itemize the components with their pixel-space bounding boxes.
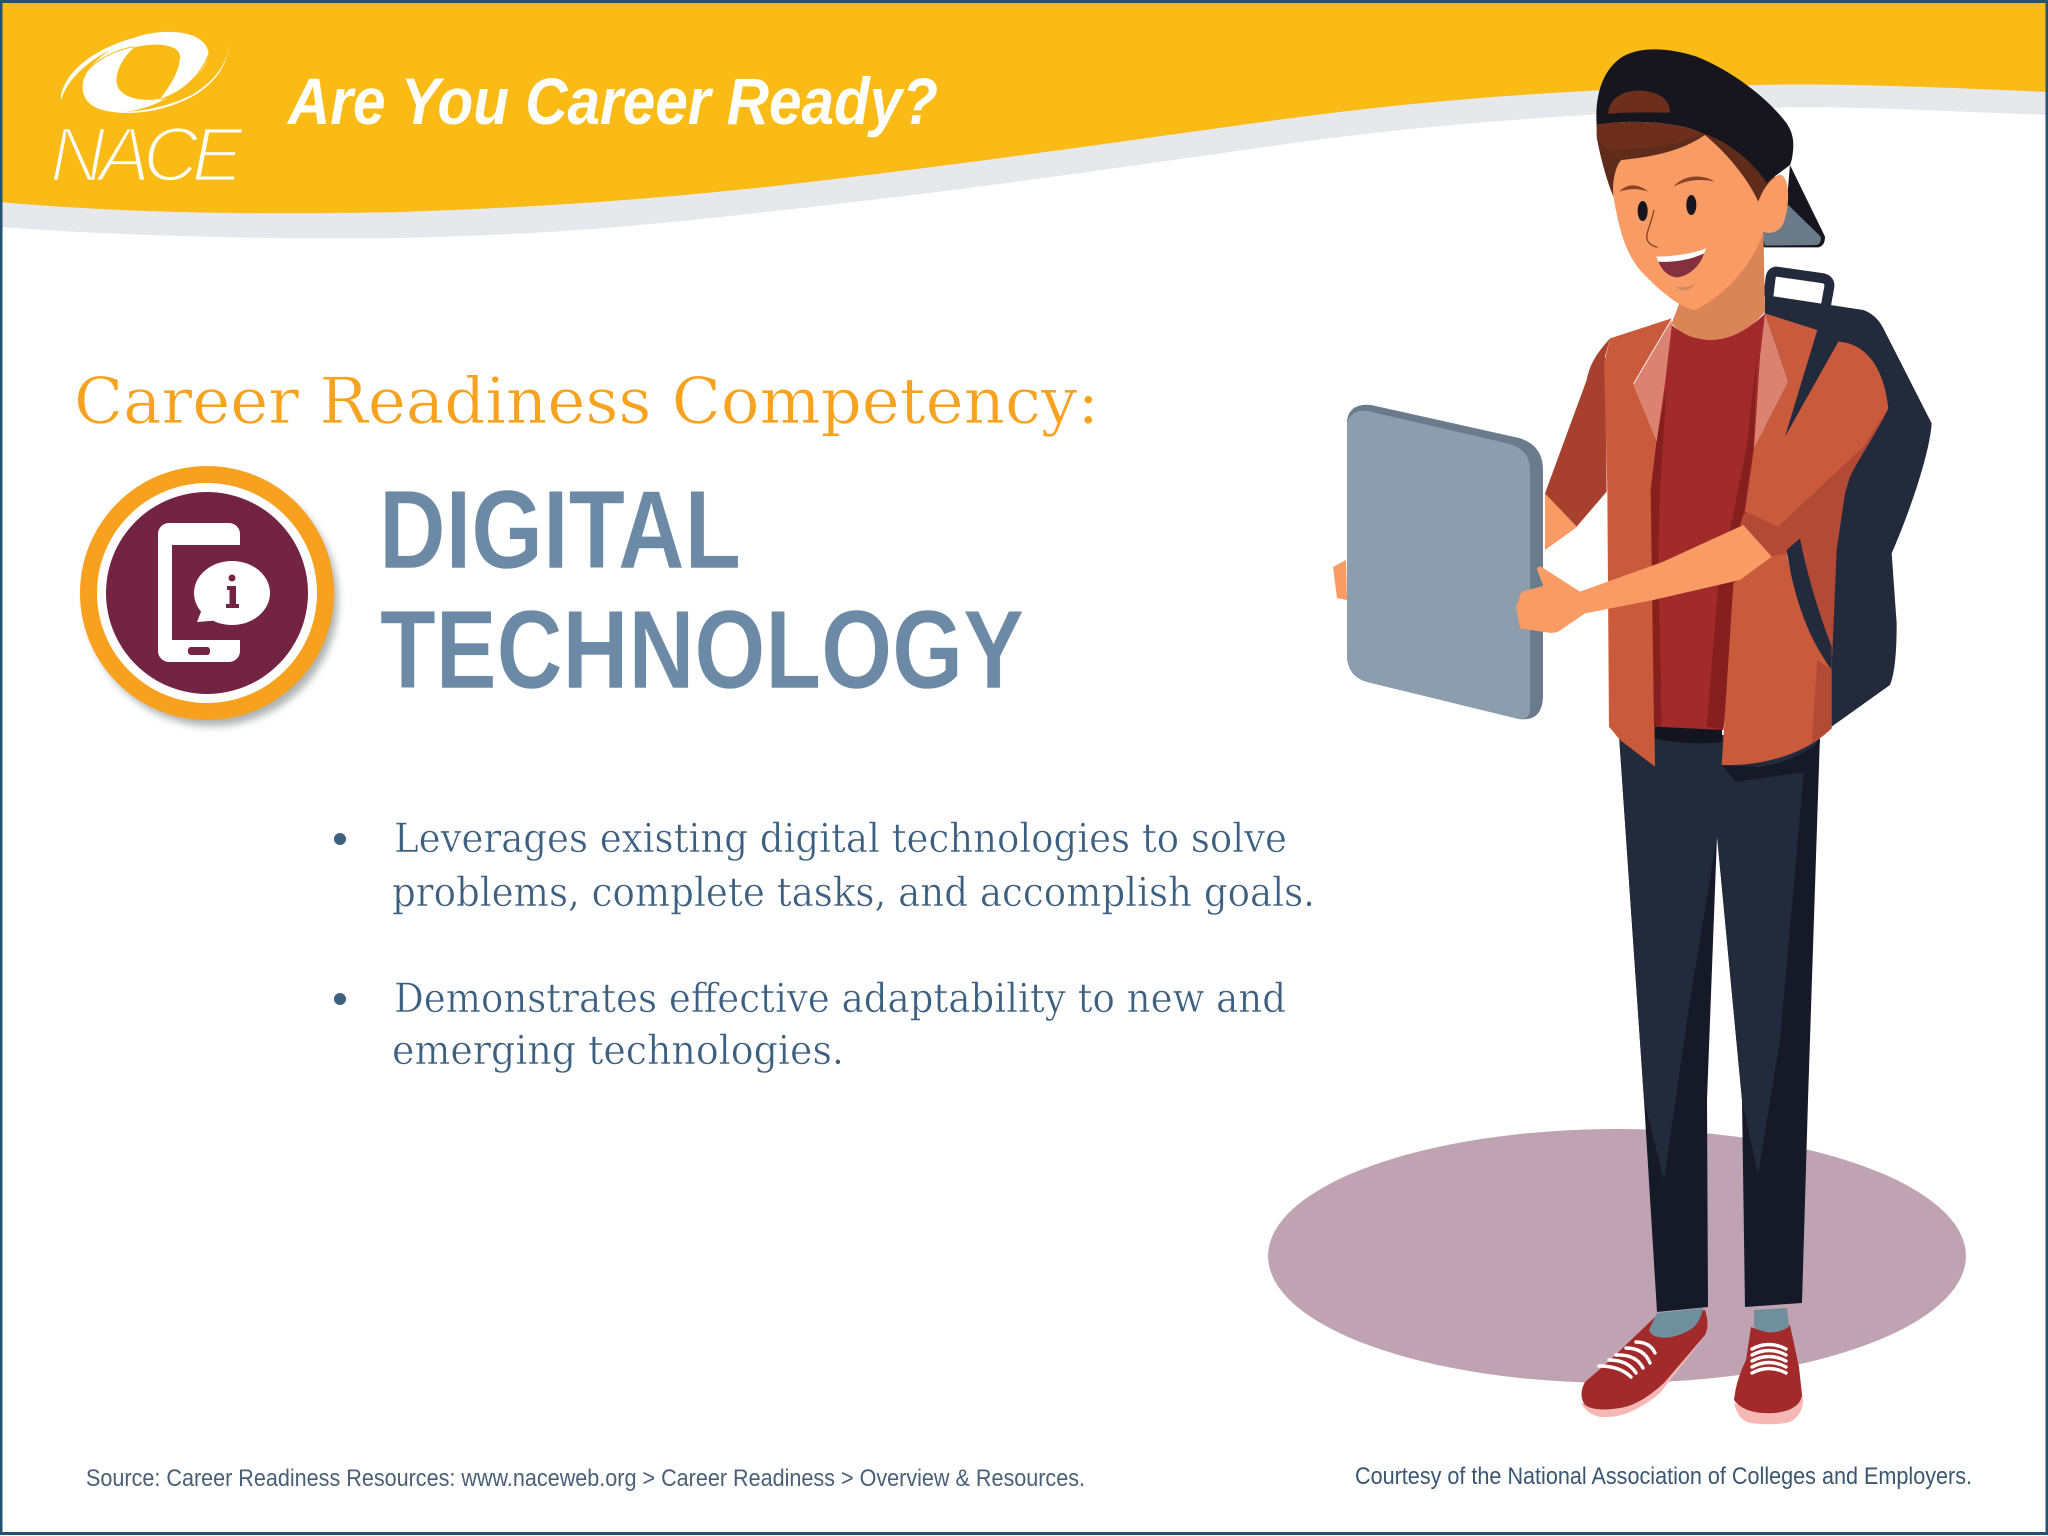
sleeve shadow — [1743, 408, 1888, 670]
sleeve cuff — [1740, 514, 1788, 560]
far hand — [1545, 493, 1577, 550]
neck — [1672, 227, 1765, 340]
hair — [1597, 125, 1793, 203]
icon: phone with info bubble badge — [80, 466, 338, 726]
backpack handle — [1768, 272, 1829, 305]
bullet list: emerging technologies. — [392, 1028, 844, 1074]
title: Are You Career Ready? — [286, 64, 938, 138]
face — [1613, 135, 1788, 310]
jacket side panel — [1812, 660, 1832, 743]
heading: digital technology: TECHNOLOGY — [380, 588, 1024, 712]
header banner — [0, 0, 2048, 239]
bullet list — [334, 816, 1315, 1074]
bullet list: Leverages existing digital technologies to solve — [394, 816, 1287, 862]
subheading: Career Readiness Competency: — [74, 365, 1099, 439]
tablet — [1347, 405, 1543, 719]
illustration: student with tablet — [1333, 49, 1932, 1424]
cap — [1596, 49, 1793, 183]
logo: NACE — [50, 32, 245, 198]
shirt fold left — [1651, 387, 1667, 727]
mouth — [1658, 253, 1704, 277]
shoes — [1581, 1308, 1803, 1424]
fringe — [1597, 122, 1703, 152]
lapel left — [1633, 320, 1672, 442]
heading: digital technology — [379, 468, 1024, 712]
eyes — [1638, 201, 1648, 221]
lapel right — [1754, 313, 1788, 448]
jacket sleeve and chest — [1745, 313, 1888, 527]
backpack strap — [1787, 538, 1832, 668]
bullet list: Demonstrates effective adaptability to new and — [394, 976, 1286, 1022]
courtesy note: Courtesy of the National Association of Colleges and Employers. — [1355, 1463, 1972, 1490]
near arm and fist — [1516, 525, 1772, 633]
heading: digital technology: DIGITAL — [379, 468, 741, 592]
trousers — [1619, 725, 1820, 1312]
ground ellipse — [1268, 1129, 1966, 1383]
cap brim — [1762, 165, 1825, 247]
nose — [1647, 210, 1657, 247]
shirt fold right — [1707, 357, 1757, 730]
chin — [1676, 284, 1695, 290]
jacket left panel — [1604, 318, 1672, 767]
tablet fingers — [1333, 560, 1347, 600]
t-shirt — [1650, 313, 1765, 730]
backpack — [1763, 295, 1932, 727]
bullet list: problems, complete tasks, and accomplish goals. — [392, 870, 1315, 916]
head and cap — [1596, 49, 1829, 340]
jacket right side — [1545, 338, 1610, 527]
logo: NACE: NACE — [50, 112, 245, 198]
lower jacket — [1722, 553, 1832, 765]
source note: Source: Career Readiness Resources: www.naceweb.org > Career Readiness > Overview & Resources. — [86, 1465, 1085, 1492]
brows — [1619, 185, 1648, 192]
torso: shirt and jacket — [1516, 313, 1888, 767]
